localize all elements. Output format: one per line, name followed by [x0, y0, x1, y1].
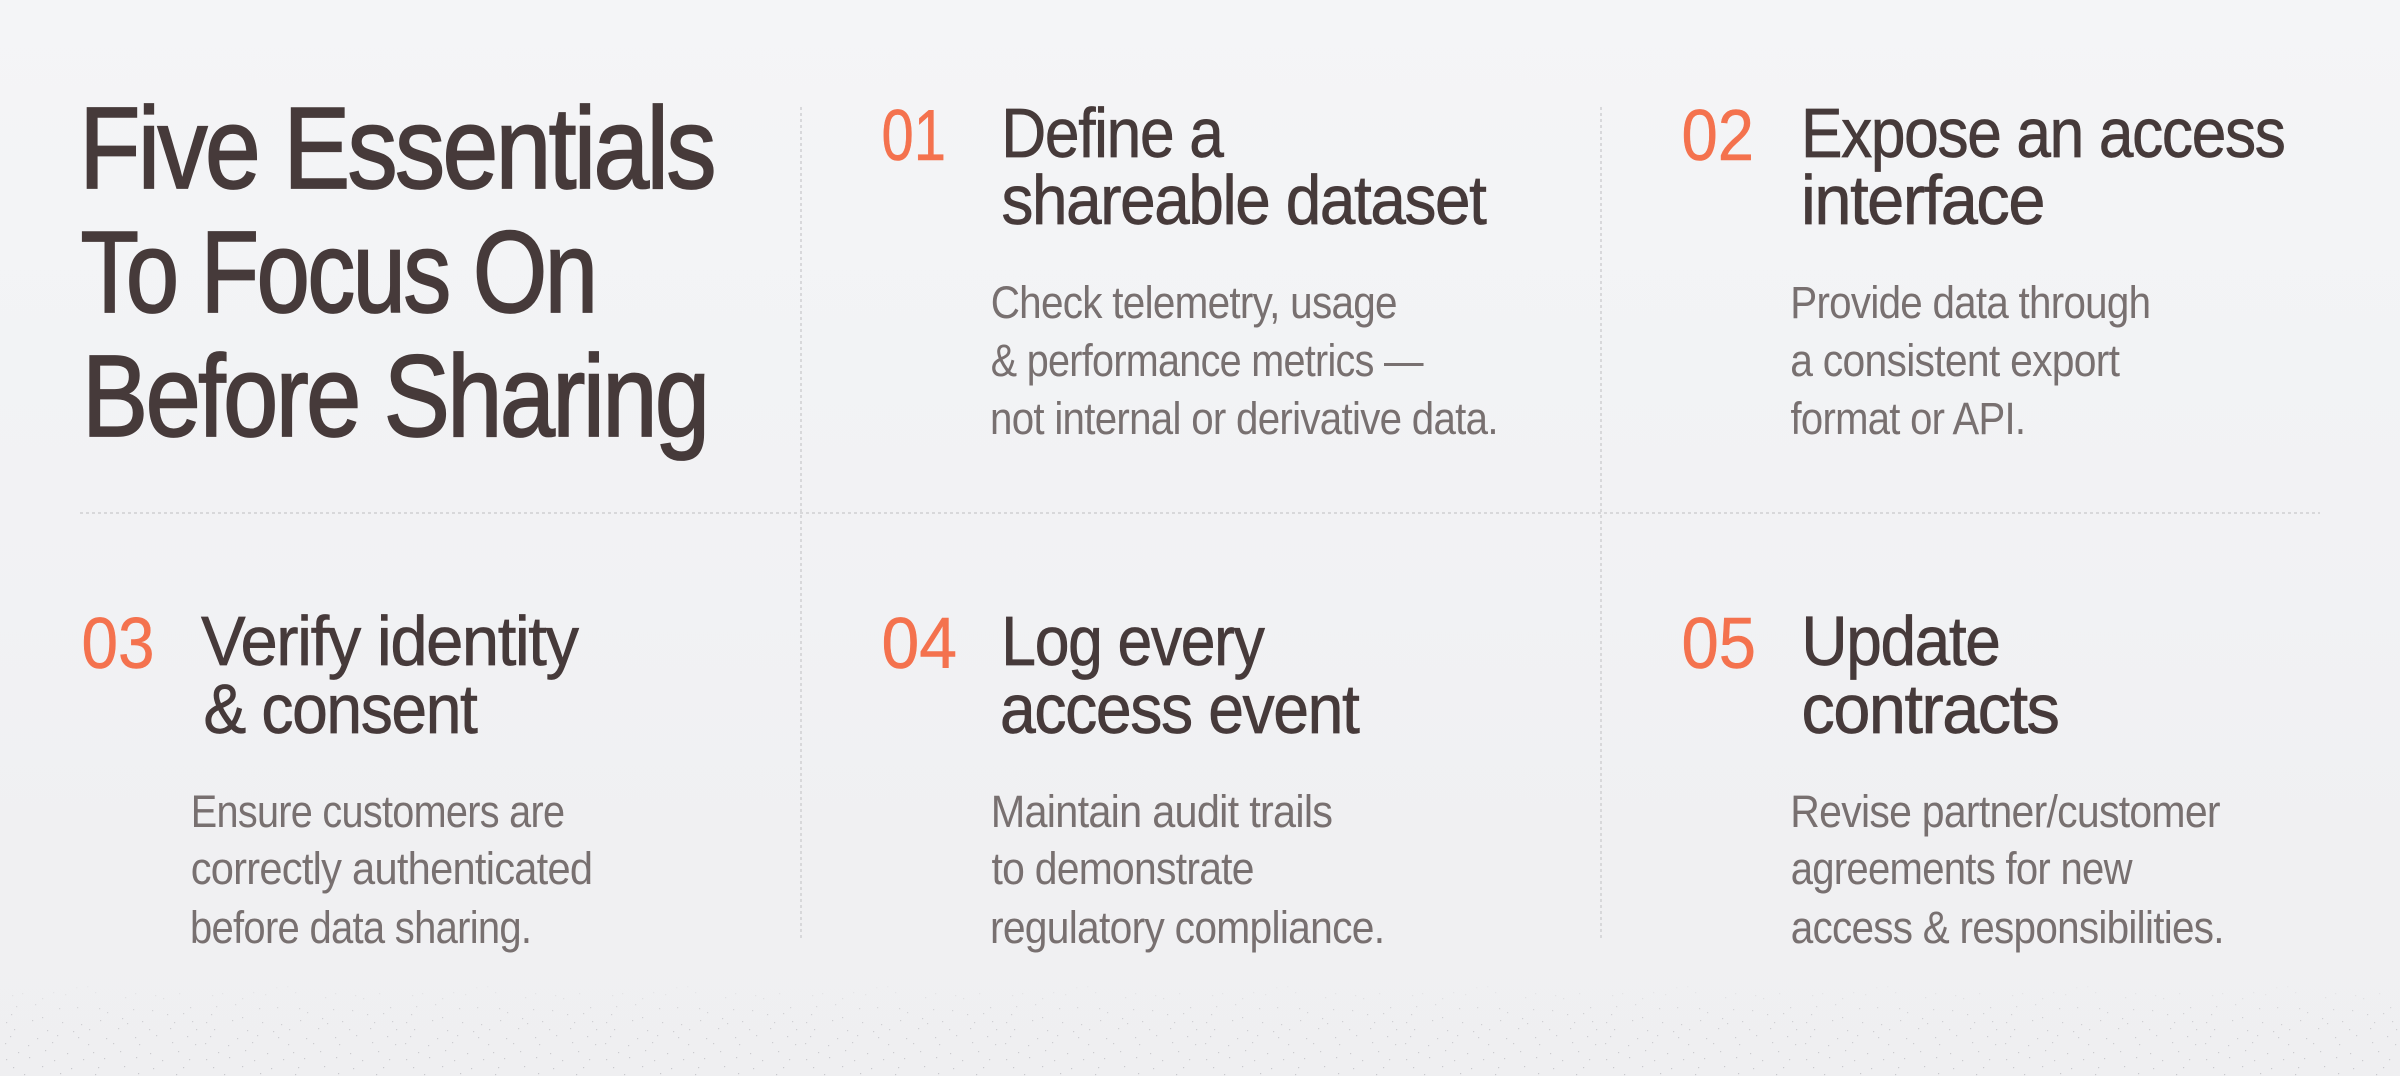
body text 03: Ensure customers are [191, 786, 564, 837]
panel: 05 update contracts [1682, 602, 2224, 953]
heading 04: access event [1000, 670, 1359, 748]
title: Before Sharing [82, 331, 708, 461]
body text 03: before data sharing. [190, 902, 531, 953]
heading 02 [1801, 94, 2284, 239]
body text 05: access & responsibilities. [1791, 902, 2224, 953]
heading 03 [201, 602, 579, 748]
title [79, 83, 714, 461]
panel: 04 log every access event [882, 602, 1384, 953]
body text 04 [990, 786, 1384, 953]
body text 05 [1790, 786, 2224, 953]
heading 02: Expose an access [1801, 94, 2284, 172]
body text 04: Maintain audit trails [991, 786, 1332, 837]
number 02: 02 [1682, 96, 1754, 176]
panel: 01 define a shareable dataset [882, 94, 1498, 444]
number 05: 05 [1682, 604, 1756, 684]
heading 02: interface [1801, 161, 2044, 239]
body text 01: Check telemetry, usage [991, 277, 1397, 328]
body text 05: agreements for new [1791, 843, 2133, 894]
heading 03: & consent [204, 670, 477, 748]
heading 01 [1001, 94, 1486, 239]
panel: 03 verify identity and consent [82, 602, 592, 953]
body text 02: a consistent export [1790, 335, 2120, 386]
number 03: 03 [82, 604, 154, 684]
number 01: 01 [882, 96, 946, 176]
body text 02: format or API. [1790, 393, 2025, 444]
heading 04: Log every [1001, 602, 1265, 680]
body text 02 [1790, 277, 2150, 444]
number 04: 04 [882, 604, 957, 684]
body text 01 [990, 277, 1498, 444]
title: To Focus On [80, 207, 596, 337]
panel: 02 expose an access interface [1682, 94, 2284, 444]
body text 01: & performance metrics — [991, 335, 1423, 386]
heading 04 [1000, 602, 1359, 748]
body text 03: correctly authenticated [191, 843, 592, 894]
body text 02: Provide data through [1790, 277, 2150, 328]
heading 03: Verify identity [201, 602, 579, 680]
body text 01: not internal or derivative data. [990, 393, 1498, 444]
heading 05: Update [1801, 602, 2000, 680]
body text 04: to demonstrate [992, 843, 1254, 894]
heading 01: shareable dataset [1002, 161, 1486, 239]
body text 03 [190, 786, 592, 953]
body text 05: Revise partner/customer [1790, 786, 2221, 837]
title: Five Essentials [79, 83, 714, 213]
heading 01: Define a [1001, 94, 1224, 172]
body text 04: regulatory compliance. [990, 902, 1384, 953]
heading 05 [1801, 602, 2058, 748]
heading 05: contracts [1802, 670, 2058, 748]
